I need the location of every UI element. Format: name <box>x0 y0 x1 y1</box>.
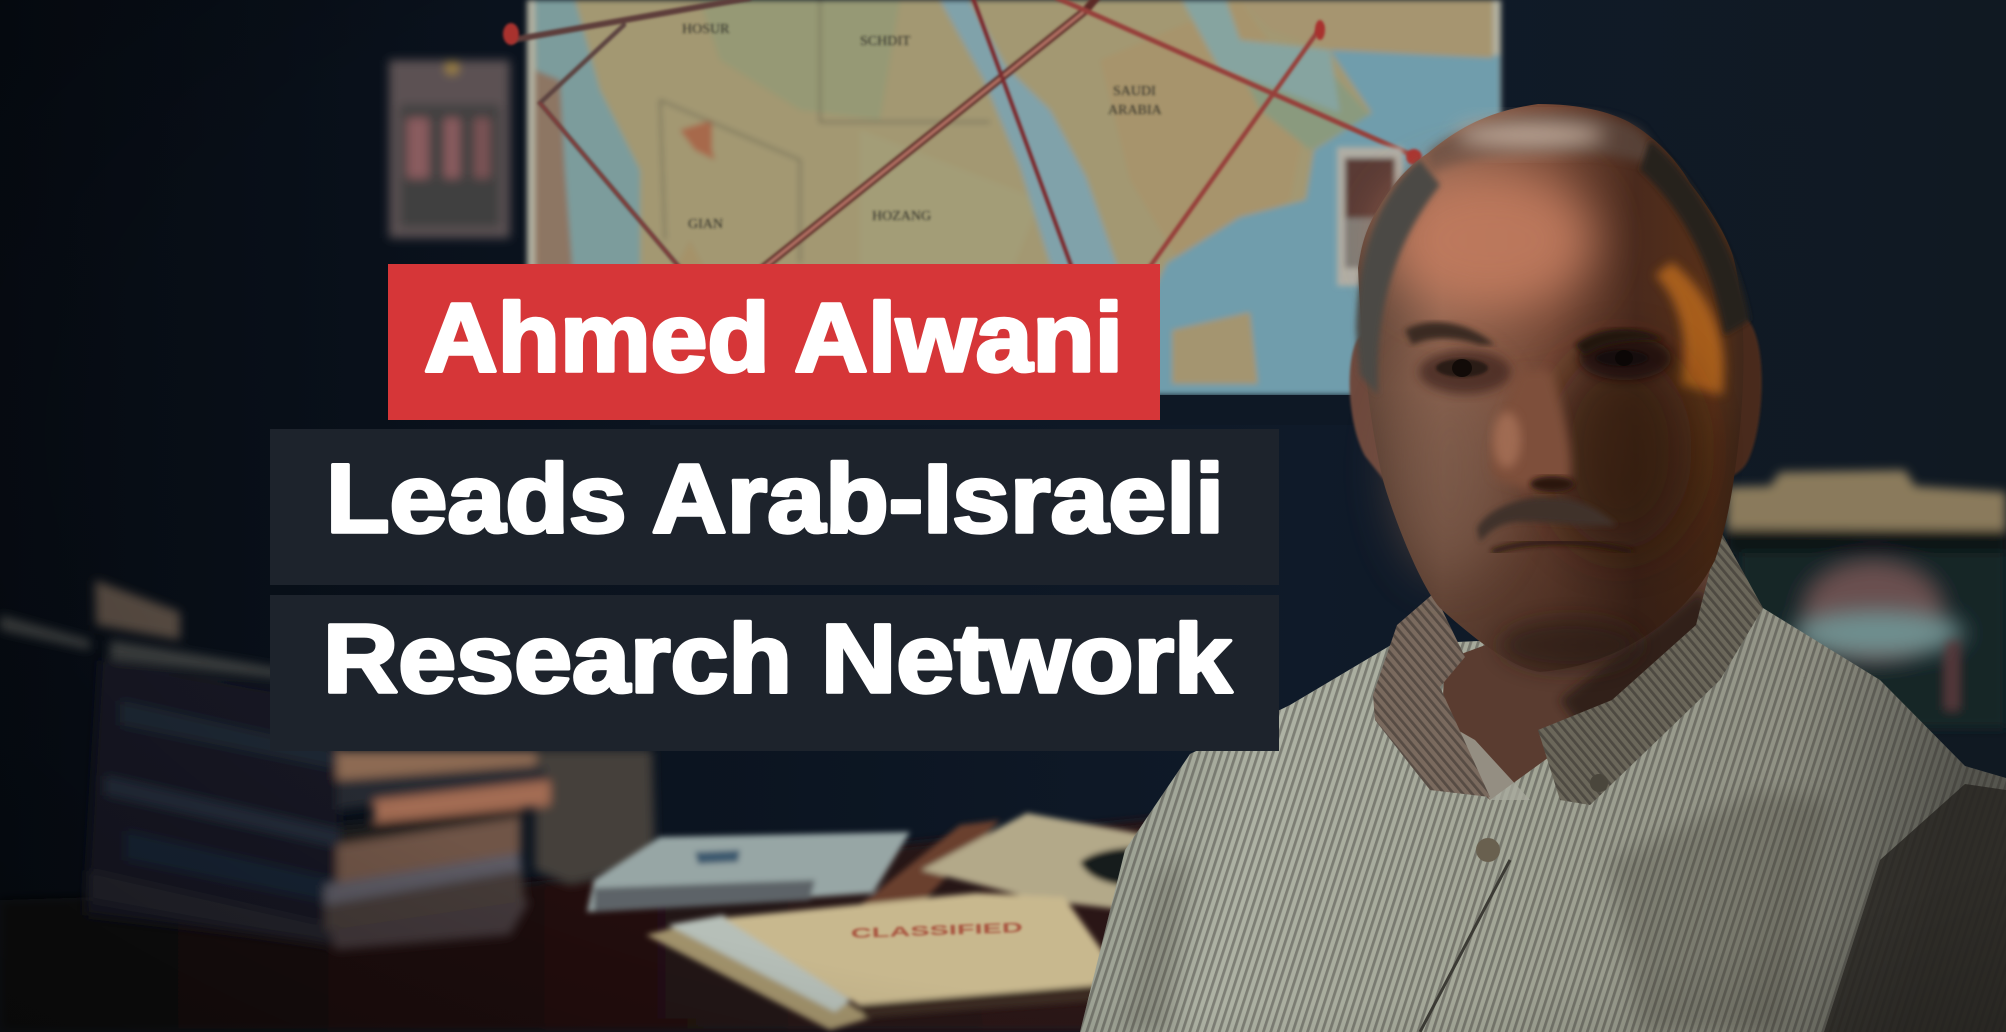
headline line two <box>270 595 1279 751</box>
map: gulf <box>1182 0 1340 113</box>
desk surface <box>0 810 1250 1032</box>
map: place labels: SAUDI <box>1113 84 1156 99</box>
map: place labels: HOZANG <box>872 209 931 224</box>
map: right sea <box>1100 50 1500 395</box>
small poster on wall <box>389 60 510 238</box>
crown shade <box>1428 113 1670 175</box>
right ear <box>1722 317 1762 480</box>
man portrait <box>1080 104 2006 1032</box>
paper pile <box>587 832 910 912</box>
right cheek shadow <box>1548 350 1692 550</box>
eyebrows <box>1405 322 1495 345</box>
map: red sea <box>940 0 1130 330</box>
map: desert patch <box>655 240 720 380</box>
name banner <box>388 264 1160 420</box>
map: green interior tint <box>700 0 900 120</box>
map: red strings <box>512 0 1416 268</box>
map: place labels: ARABIA <box>1108 103 1163 118</box>
head <box>1356 104 1750 672</box>
collar and placket buttons <box>1476 838 1500 862</box>
mouth <box>1492 542 1632 552</box>
chin shadow <box>1500 619 1640 671</box>
left ear <box>1350 335 1395 490</box>
monitor and folder at right <box>1727 470 2006 728</box>
map: top-right land <box>1240 0 1493 58</box>
map: place labels <box>682 22 1163 232</box>
papers and folders on the desk <box>587 813 1175 1030</box>
left eye <box>1436 359 1488 377</box>
left hair <box>1356 160 1440 395</box>
shirt <box>1080 550 2006 1032</box>
map: place labels: HOSUR <box>682 22 730 37</box>
back folder <box>860 820 1000 910</box>
map: wall shadow bottom <box>650 395 1500 425</box>
right collar <box>1538 530 1763 805</box>
folder stamp: CLASSIFIED <box>851 919 1023 941</box>
map: place labels: GIAN <box>688 217 723 232</box>
headline line one: Leads Arab-Israeli <box>326 444 1224 553</box>
map: lower land <box>1172 312 1258 384</box>
left cheek <box>1395 365 1505 575</box>
map: place labels: SCHDIT <box>860 34 911 49</box>
pinned photo on map <box>1337 147 1403 286</box>
wall map <box>503 0 1501 425</box>
moustache <box>1477 497 1617 542</box>
headline line two: Research Network <box>323 604 1233 713</box>
orange rim light <box>1655 262 1724 395</box>
right hair <box>1640 140 1750 335</box>
right eye <box>1596 350 1648 366</box>
map: pins <box>503 20 1422 165</box>
headline line one <box>270 429 1279 585</box>
title block <box>270 264 1279 751</box>
name banner: Ahmed Alwani <box>424 283 1123 392</box>
book stacks <box>0 580 655 950</box>
front folder <box>646 915 870 1030</box>
forehead light <box>1385 168 1595 312</box>
eye sockets <box>1419 350 1511 394</box>
map: left sea <box>535 0 640 390</box>
left collar <box>1373 593 1490 797</box>
nose <box>1490 370 1571 489</box>
neck <box>1440 560 1720 800</box>
